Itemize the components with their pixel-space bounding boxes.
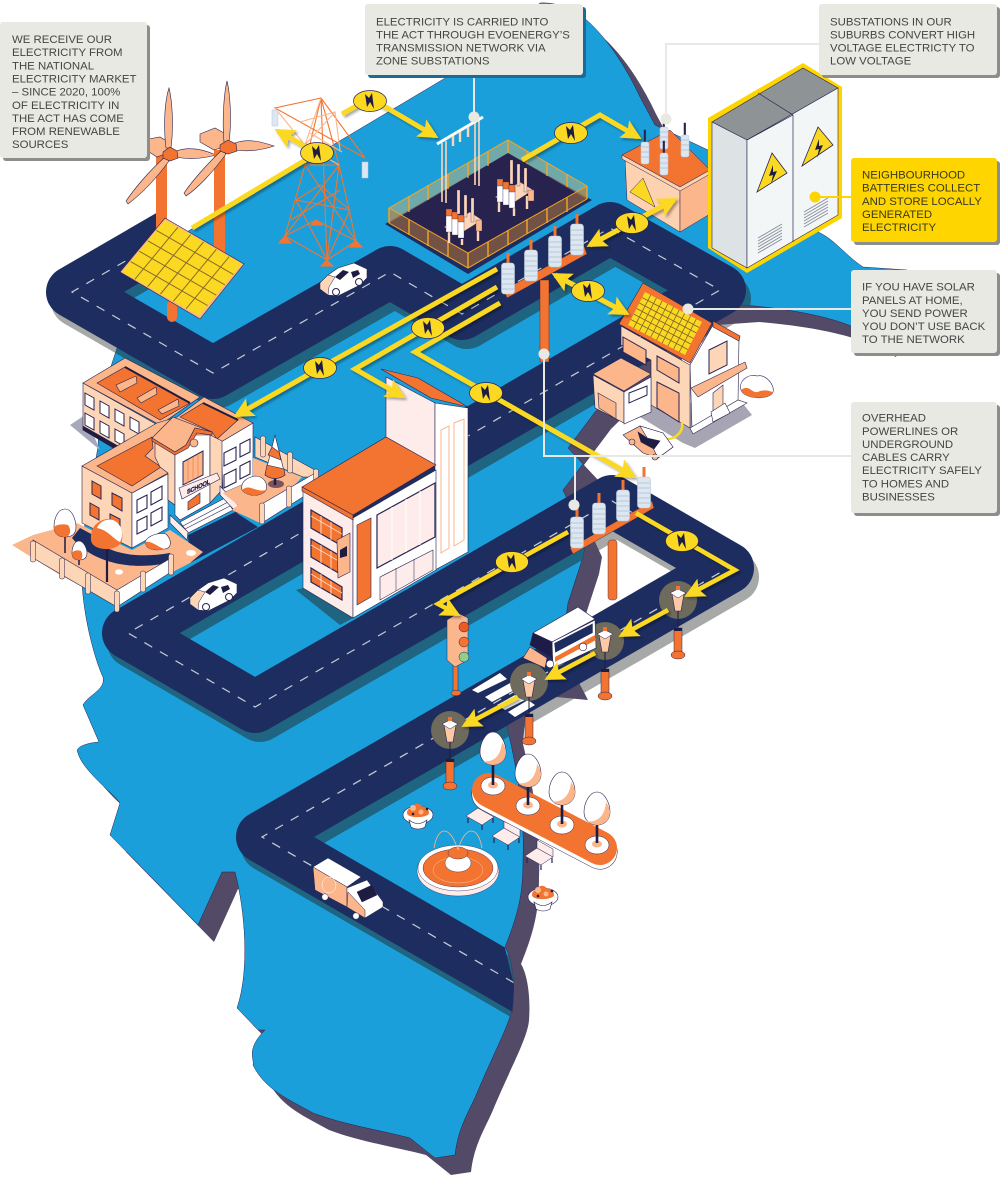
callout: powerlines: TO HOMES AND <box>862 478 949 490</box>
house with rooftop solar <box>593 283 773 448</box>
callout: national electricity market <box>0 22 150 161</box>
delivery truck <box>313 858 383 919</box>
callout: suburb substations: SUBSTATIONS IN OUR <box>830 16 952 28</box>
callout: home solar <box>851 270 1000 356</box>
bus <box>523 607 596 668</box>
callout: home solar: PANELS AT HOME, <box>862 295 963 307</box>
icon: warning triangle right door <box>802 127 833 166</box>
callout: national electricity market: THE ACT HAS COME <box>12 113 124 125</box>
road shadow on white ground <box>52 308 759 728</box>
substation switchgear <box>444 160 534 245</box>
callout: powerlines: POWERLINES OR <box>862 426 958 438</box>
car on upper road <box>320 263 367 296</box>
yellow power flow arrows: street network <box>438 513 735 725</box>
power pole upper <box>502 214 587 362</box>
callout: suburb substations <box>819 4 1000 78</box>
callout: national electricity market: SOURCES <box>12 139 69 151</box>
car on middle road <box>190 578 237 611</box>
callout: suburb substations: LOW VOLTAGE <box>830 56 912 68</box>
school right courtyard <box>223 435 318 524</box>
callout: powerlines: CABLES CARRY <box>862 452 950 464</box>
callout: powerlines <box>851 402 1000 516</box>
callout: neighbourhood batteries: GENERATED <box>862 209 932 221</box>
connector: suburb substation callout <box>660 44 819 124</box>
distribution substation <box>622 115 710 232</box>
callout: neighbourhood batteries: AND STORE LOCALLY <box>862 196 982 208</box>
wind turbine right <box>184 81 274 256</box>
callout: transmission network: ZONE SUBSTATIONS <box>376 56 490 68</box>
office building <box>296 369 468 625</box>
street light glows <box>431 581 697 749</box>
park with raised planter, trees and benches <box>466 732 610 870</box>
transmission tower <box>272 98 368 266</box>
power pole lower <box>570 467 654 600</box>
callout: national electricity market: WE RECEIVE OUR <box>12 34 112 46</box>
callout: national electricity market: ELECTRICITY MARKET <box>12 74 137 86</box>
callout: transmission network: TRANSMISSION NETWORK VIA <box>376 42 546 54</box>
callout: national electricity market: OF ELECTRICITY IN <box>12 100 119 112</box>
school forecourt road patch <box>188 512 258 563</box>
callout: national electricity market: – SINCE 2020, 100% <box>12 87 120 99</box>
callout: powerlines: ELECTRICITY SAFELY <box>862 465 982 477</box>
callout: transmission network: THE ACT THROUGH EVOENERGY’S <box>376 29 570 41</box>
wind turbine left <box>126 88 216 230</box>
callout: home solar: TO THE NETWORK <box>862 334 965 346</box>
callout: suburb substations: VOLTAGE ELECTRICTY TO <box>830 42 975 54</box>
bush beside house <box>741 375 773 398</box>
callout: transmission network: ELECTRICITY IS CARRIED INTO <box>376 16 549 28</box>
connector: battery callout <box>810 192 851 202</box>
school main building <box>82 397 253 548</box>
courtyard bush <box>242 476 267 495</box>
school back building <box>70 358 200 480</box>
egg tree large <box>54 509 76 553</box>
substation gantry <box>437 117 483 203</box>
egg tree small <box>72 541 87 565</box>
road network <box>72 228 728 992</box>
energy badges <box>300 90 698 572</box>
solar panel array <box>120 218 244 322</box>
callout: neighbourhood batteries: ELECTRICITY <box>862 222 936 234</box>
callout: powerlines: OVERHEAD <box>862 413 926 425</box>
yellow power flow arrows: generation and transmission <box>192 98 674 476</box>
round tree <box>91 519 122 582</box>
road shadow on land <box>77 237 733 1001</box>
cone tree <box>265 435 285 488</box>
fountain <box>417 831 499 896</box>
zone substation platform <box>385 140 592 274</box>
callout: national electricity market: THE NATIONAL <box>12 60 94 72</box>
callout: neighbourhood batteries <box>851 158 1000 245</box>
electric car at house <box>623 422 682 460</box>
callout: national electricity market: FROM RENEWABLE <box>12 126 120 138</box>
callout: home solar: YOU DON’T USE BACK <box>862 321 986 333</box>
connector: home solar callout <box>682 304 851 314</box>
callout: powerlines: BUSINESSES <box>862 491 935 503</box>
icon: warning triangle left door <box>757 153 787 192</box>
callout: national electricity market: ELECTRICITY FROM <box>12 47 123 59</box>
callout: powerlines: UNDERGROUND <box>862 439 953 451</box>
courtyard stones <box>115 550 196 575</box>
street lamps <box>442 586 686 790</box>
callout: suburb substations: SUBURBS CONVERT HIGH <box>830 29 975 41</box>
callout: transmission network <box>365 4 586 78</box>
school sign: SCHOOL <box>187 479 210 496</box>
planter bottom <box>528 886 558 911</box>
callout: neighbourhood batteries: NEIGHBOURHOOD <box>862 170 965 182</box>
crosswalk <box>472 673 535 717</box>
callout: home solar: IF YOU HAVE SOLAR <box>862 282 975 294</box>
connector: powerlines callout <box>538 348 851 510</box>
neighbourhood battery cabinet <box>708 63 842 273</box>
callout: neighbourhood batteries: BATTERIES COLLECT <box>862 183 980 195</box>
bush front <box>145 533 170 550</box>
school left courtyard <box>12 509 203 612</box>
planter top <box>403 804 433 829</box>
connector: zone substation callout <box>468 75 480 122</box>
traffic light <box>447 613 469 696</box>
callout: home solar: YOU SEND POWER <box>862 308 968 320</box>
